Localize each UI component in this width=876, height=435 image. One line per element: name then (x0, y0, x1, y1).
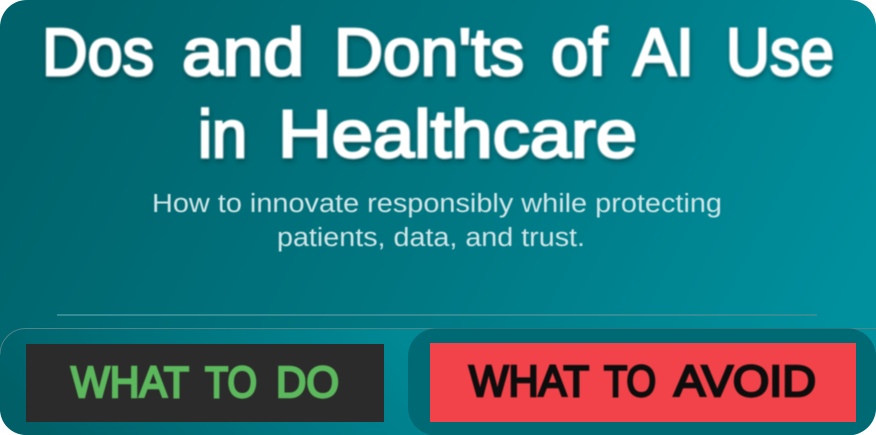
panel: what to avoid (408, 328, 876, 435)
button: what to do (26, 344, 384, 422)
title: of (551, 15, 607, 90)
title: Use (726, 15, 834, 90)
subtitle: How to innovate responsibly while protecting (152, 190, 722, 218)
button: what to avoid: TO (604, 357, 656, 406)
title: Dos (42, 15, 154, 90)
title (42, 15, 834, 172)
button: what to do: DO (276, 358, 339, 407)
title: AI (633, 15, 694, 90)
subtitle: patients, data, and trust. (277, 224, 585, 252)
title: and (182, 15, 304, 90)
button: what to avoid (430, 343, 856, 422)
button: what to avoid: WHAT (469, 357, 589, 406)
button: what to do: WHAT (71, 358, 189, 407)
title: in (198, 97, 247, 172)
title: Healthcare (278, 97, 637, 172)
button: what to avoid: AVOID (674, 357, 816, 406)
subtitle (152, 190, 722, 252)
button: what to do: TO (205, 358, 257, 407)
title: Don'ts (334, 15, 524, 90)
divider line (57, 314, 817, 316)
panel: what to do (0, 328, 876, 435)
